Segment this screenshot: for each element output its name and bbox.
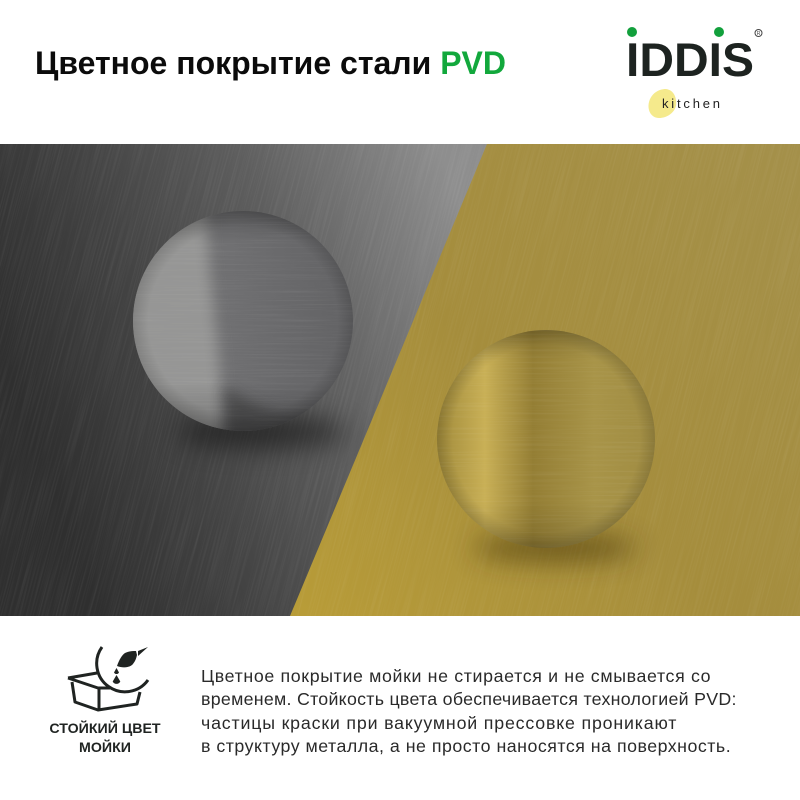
logo: IDDIS kitchen: IDDIS bbox=[626, 33, 754, 86]
description text: частицы краски при вакуумной прессовке проникают bbox=[201, 713, 677, 733]
icon caption: МОЙКИ bbox=[79, 740, 131, 756]
icon: box with paint brush bbox=[68, 646, 150, 712]
logo: IDDIS kitchen: kitchen bbox=[662, 96, 720, 111]
graphite surface bbox=[0, 144, 490, 616]
description text bbox=[201, 666, 737, 756]
title: Цветное покрытие стали PVD bbox=[35, 45, 506, 81]
box bbox=[68, 673, 140, 710]
description text: в структуру металла, а не просто наносятся на поверхность. bbox=[201, 736, 731, 756]
logo: IDDIS kitchen: R bbox=[757, 31, 761, 37]
paint disc arc bbox=[97, 647, 148, 692]
metal photo panel bbox=[0, 144, 800, 616]
icon caption: СТОЙКИЙ ЦВЕТ bbox=[49, 721, 161, 737]
description text: временем. Стойкость цвета обеспечивается технологией PVD: bbox=[201, 689, 737, 709]
gold sphere bbox=[437, 330, 655, 562]
graphite sphere bbox=[120, 200, 353, 448]
icon caption bbox=[49, 720, 161, 756]
logo: IDDIS kitchen bbox=[626, 27, 762, 118]
gold surface bbox=[0, 144, 800, 616]
icon: brush and drops bbox=[113, 647, 148, 684]
description text: Цветное покрытие мойки не стирается и не смывается со bbox=[201, 666, 711, 686]
